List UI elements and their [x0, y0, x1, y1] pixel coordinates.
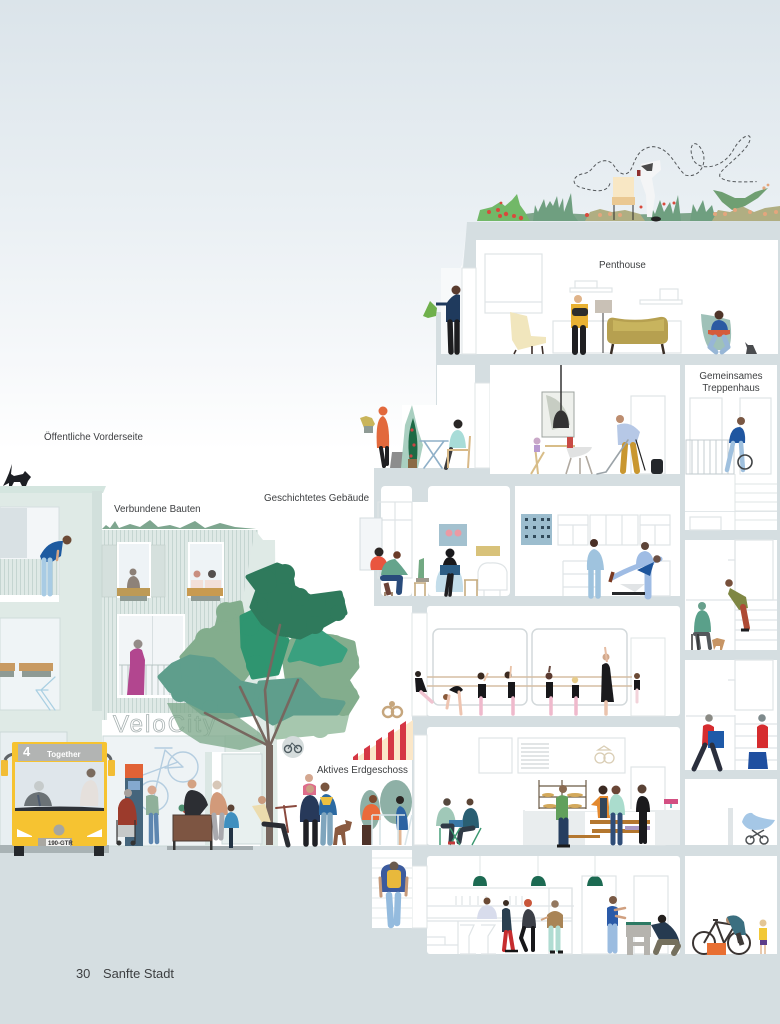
- man with vacuum: [597, 415, 663, 474]
- shop window bicycle: [138, 748, 198, 811]
- customer in green: [556, 785, 570, 846]
- teacher: [601, 647, 614, 714]
- dog: [333, 820, 352, 845]
- woman in hijab reading: [436, 548, 463, 595]
- ground: [0, 846, 780, 1024]
- dancer 5: [546, 666, 553, 714]
- stool: [464, 580, 478, 596]
- page footer: Sanfte Stadt: [103, 966, 174, 981]
- child in yellow: [759, 920, 767, 954]
- small dog: [712, 638, 725, 650]
- flowering meadow: [585, 206, 780, 221]
- cat on cornice: [3, 464, 31, 486]
- window with person reading: [117, 543, 150, 601]
- foliage: mid green: [241, 610, 287, 677]
- man with yellow backpack: [372, 858, 412, 925]
- label: public front: Öffentliche Vorderseite: [44, 432, 143, 443]
- bread shelves: [539, 780, 586, 822]
- fourth floor: [427, 606, 680, 716]
- railing: [686, 440, 734, 474]
- roof garden: [477, 136, 780, 222]
- doors: [582, 876, 668, 954]
- crouching man: [651, 915, 680, 953]
- barre: [427, 677, 632, 686]
- woman in orange: [377, 406, 389, 466]
- tall leaves: [713, 188, 768, 210]
- basement bar: [427, 856, 680, 955]
- man with wheelchair: [727, 417, 752, 470]
- outlined armchair: [478, 563, 507, 596]
- child on scooter: [224, 804, 239, 848]
- lower window: [0, 618, 60, 710]
- window: [485, 254, 542, 313]
- label: layered building: Geschichtetes Gebäude: [264, 493, 370, 504]
- cream armchair: [510, 312, 546, 354]
- sky background: [0, 0, 780, 450]
- stairwell middle: [686, 540, 777, 845]
- shared stairwell upper: [686, 371, 777, 530]
- man with plant on balcony: [423, 286, 460, 352]
- delivery man with box: [694, 714, 724, 769]
- pendant lamp: [553, 365, 569, 428]
- olive sofa: [607, 317, 668, 354]
- doors: [690, 398, 771, 474]
- stairs: [735, 474, 777, 530]
- boy in red trousers: [502, 900, 518, 951]
- woman in blue: [396, 796, 408, 845]
- foosball player: [607, 896, 625, 951]
- foliage: light left: [180, 602, 260, 683]
- bakery floor: [436, 738, 680, 846]
- father with child on shoulders: [300, 774, 320, 844]
- sidewalk cafe: [360, 780, 412, 845]
- window with couple: [187, 543, 223, 601]
- door: [631, 638, 665, 716]
- third floor rooms: [381, 486, 412, 596]
- shelves and table outlines: [553, 281, 682, 353]
- main building structure: [0, 221, 780, 1024]
- bicycle: [693, 920, 750, 954]
- cargo bike and parent: [173, 780, 212, 850]
- bar shelves and stairs outlines: [427, 888, 574, 954]
- two men at cafe table: [436, 798, 481, 845]
- shared stairwell upper: Gemeinsames: [699, 371, 763, 382]
- foliage: dark crown: [248, 564, 346, 637]
- foliage: translucent lower left: [167, 703, 267, 750]
- man bending in green: [725, 579, 749, 630]
- windscreen with driver: [15, 762, 104, 809]
- foliage: teal centre: [253, 680, 343, 723]
- label: penthouse: Penthouse: [599, 260, 646, 271]
- dancer 4: [504, 666, 515, 714]
- bus: 190-GTR: [48, 841, 73, 847]
- counter: [523, 809, 680, 845]
- tree: [160, 564, 359, 845]
- customer in black: [636, 784, 650, 842]
- page footer: 30: [76, 966, 90, 981]
- man in orange: [362, 795, 381, 845]
- barman: [477, 898, 497, 919]
- bakery logo: [595, 746, 614, 763]
- girl at door: [634, 673, 640, 702]
- dancer 6: [572, 677, 579, 714]
- label: connected buildings: Verbundene Bauten: [114, 504, 201, 515]
- apartment doors and stairs: [686, 540, 777, 770]
- shutters: [102, 545, 165, 597]
- bike repair: [693, 915, 767, 955]
- penthouse room: [476, 240, 778, 354]
- woman with peach top: [210, 780, 228, 838]
- shared stairwell upper: Treppenhaus: [702, 383, 760, 394]
- third floor contents: [360, 502, 670, 596]
- low planting strip: [525, 212, 780, 221]
- dentist: [587, 539, 604, 596]
- label: active ground floor: Aktives Erdgeschoss: [317, 765, 408, 776]
- shopfront: [103, 711, 262, 846]
- foliage: light right: [283, 632, 359, 716]
- old woman with walker: [116, 789, 137, 846]
- ballet studio: [415, 629, 665, 716]
- left stair pit: [372, 850, 412, 928]
- man in tan shirt: [541, 900, 563, 952]
- assistant and patient: [610, 542, 661, 596]
- folding table: [420, 441, 448, 468]
- mechanic: [726, 915, 746, 945]
- living floor contents: [360, 365, 665, 474]
- elderly man seated with cane: [692, 602, 711, 650]
- stairwell rooms: [685, 365, 777, 530]
- upper terrace and living room: [437, 365, 475, 468]
- bus: [0, 742, 115, 856]
- highchair and table: [531, 437, 592, 474]
- wall posters: [479, 738, 665, 845]
- wedge of sky beside upper floors: [441, 225, 467, 353]
- dental chart: [521, 514, 552, 545]
- woman in red: [370, 548, 388, 570]
- woman in blue with scarf: [319, 782, 337, 843]
- bakery awning: [353, 701, 413, 760]
- woman with bag: [748, 714, 768, 769]
- kiosk pillar: [125, 764, 143, 846]
- posters: [439, 524, 500, 556]
- cabinets: [558, 515, 670, 596]
- dancer 1: [415, 671, 432, 702]
- street people: [116, 774, 352, 850]
- stroller: [742, 813, 775, 844]
- foliage: teal left: [160, 657, 260, 717]
- bus: Together: [47, 750, 81, 759]
- bus: 4: [23, 744, 31, 759]
- man reading on bench: [252, 796, 296, 845]
- picture: [542, 392, 574, 437]
- balcony window with woman in purple: [118, 615, 186, 698]
- pavement strip under cargo bike: [167, 846, 253, 850]
- beekeeper: [637, 160, 661, 222]
- bushes: [360, 780, 412, 830]
- foliage: mid green right: [290, 632, 345, 664]
- cake stand: [664, 799, 678, 808]
- plant on table: [414, 558, 429, 596]
- bee hive: [612, 177, 635, 220]
- seated woman sunglasses: [521, 899, 536, 950]
- seated woman: [446, 420, 470, 468]
- foliage: pale lower right: [277, 707, 347, 738]
- window: [378, 502, 412, 578]
- bike sign: [282, 736, 304, 758]
- pendant lamps: [473, 856, 603, 886]
- dancer 2: [443, 686, 463, 714]
- man in green seated: [381, 551, 408, 596]
- left building: [0, 464, 106, 846]
- basement floor: [427, 856, 680, 954]
- fifth floor: [427, 727, 680, 845]
- bee flight path: [574, 136, 757, 191]
- orange toolbox: [707, 943, 726, 955]
- woman holding baby: [571, 295, 588, 352]
- man leaning on balcony: [40, 536, 72, 594]
- reader in egg chair: [701, 310, 731, 352]
- cat: [745, 342, 757, 354]
- spiky grasses: [533, 193, 716, 221]
- labels: [44, 260, 646, 776]
- table and chairs: [372, 815, 412, 845]
- dancer 3: [478, 672, 488, 714]
- mirrors: [433, 629, 627, 705]
- upper window: [0, 507, 59, 602]
- baker in orange: [591, 786, 610, 818]
- trunk: [205, 625, 298, 748]
- shopfront: VeloCity: [113, 711, 217, 738]
- green roof strip: [102, 520, 256, 529]
- watering can: [390, 452, 412, 468]
- tomato plant: [401, 405, 423, 468]
- connected building: [102, 520, 278, 846]
- floor lamp: [595, 300, 612, 353]
- flower box: [360, 416, 375, 433]
- foosball table: [626, 922, 651, 955]
- man in green: [146, 786, 159, 842]
- customer in mint: [609, 786, 625, 843]
- door: [631, 396, 665, 474]
- bright berry bush: [477, 194, 530, 221]
- bar stools: [460, 925, 496, 954]
- penthouse contents: [423, 254, 757, 354]
